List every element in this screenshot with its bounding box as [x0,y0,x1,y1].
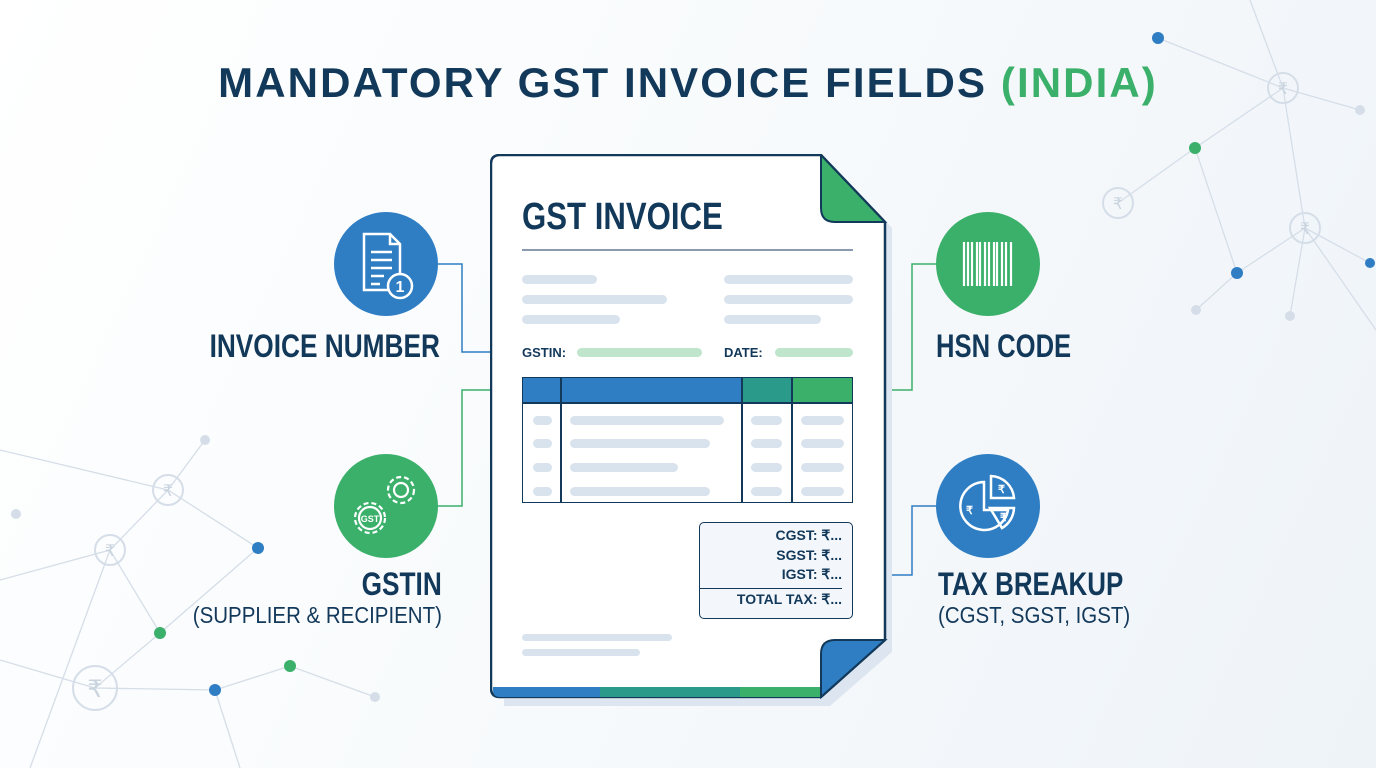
icon: pie: ₹ [966,505,973,517]
item: tax breakup [936,454,1130,628]
icon: barcode [936,212,1040,316]
icon: pie: ₹ [998,484,1005,496]
background network: ₹ [1300,221,1310,238]
gstin/date row: GSTIN: [522,345,566,360]
item table [522,377,853,503]
background network: ₹ [105,543,115,560]
icon: pie: ₹ [1000,512,1007,524]
tax box: CGST: ₹... [776,527,842,543]
item: tax breakup: (CGST, SGST, IGST) [938,602,1130,628]
tax box: IGST: ₹... [782,566,842,582]
label: INVOICE NUMBER [210,328,440,364]
label: HSN CODE [936,328,1071,364]
background network: ₹ [163,483,173,500]
background network: ₹ [1278,81,1288,98]
tax box: SGST: ₹... [776,546,842,562]
icon: gears: GST [361,514,380,524]
icon: pie [936,454,1040,558]
invoice document [490,154,892,706]
icon: document: 1 [396,279,405,296]
label: GSTIN [362,566,442,602]
background network: ₹ [87,676,103,703]
label: TAX BREAKUP [938,566,1123,602]
tax box [699,522,853,619]
item: gstin [193,454,442,628]
invoice document: DATE: [724,345,763,360]
item: hsn code [936,212,1071,364]
tax box: TOTAL TAX: ₹... [737,590,842,606]
item: invoice number [210,212,440,364]
icon: document [334,212,438,316]
icon: gears [334,454,438,558]
item: gstin: (SUPPLIER & RECIPIENT) [193,602,442,628]
doc title: GST INVOICE [522,196,723,238]
title: MANDATORY GST INVOICE FIELDS (INDIA) [218,59,1158,106]
background network: ₹ [1113,196,1123,213]
